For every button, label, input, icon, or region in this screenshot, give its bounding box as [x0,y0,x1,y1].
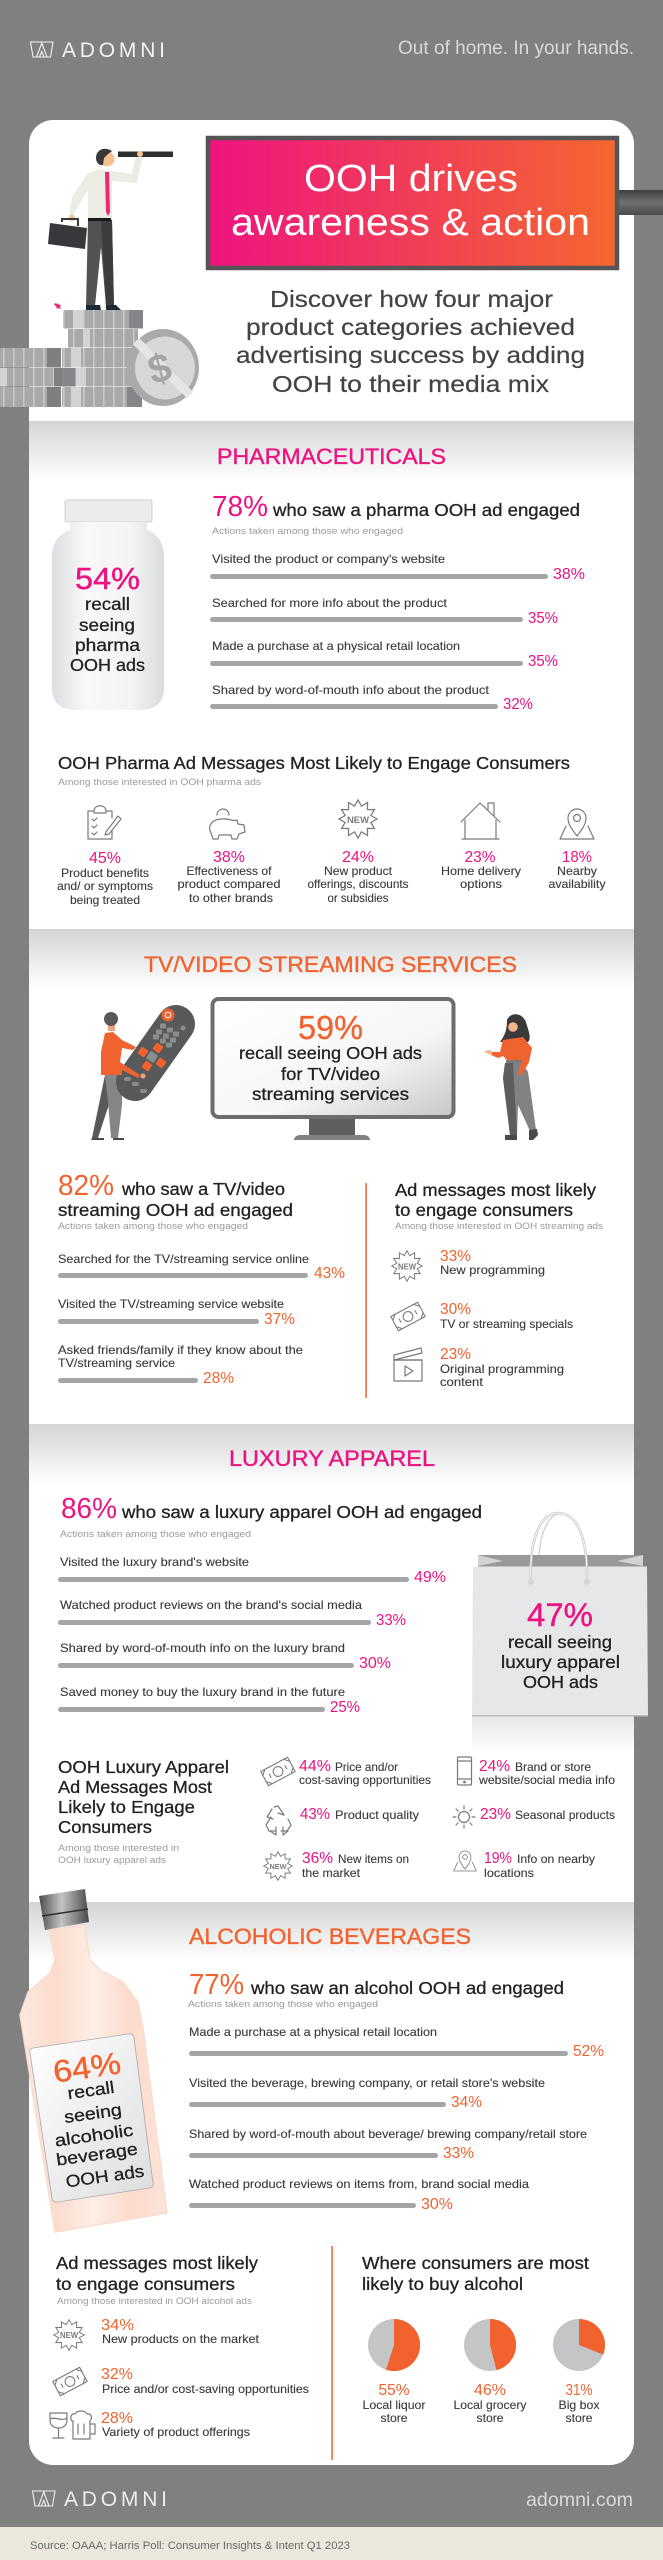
panel: intro [0,138,663,407]
messages heading: Likely to Engage [58,1797,195,1817]
intro text: advertising success by adding [236,342,585,368]
item: new items [264,1850,409,1880]
heading: LUXURY APPAREL [229,1446,435,1471]
pill bottle with 54% recall: pharma [75,635,140,655]
bar chart: luxury actions: 33% [376,1612,406,1629]
pie chart: local grocery store [454,2319,526,2425]
pie chart: local liquor store: store [380,2411,408,2425]
messages heading [395,1180,604,1231]
footer [0,2488,663,2560]
bar chart: streaming actions: 43% [314,1265,345,1282]
item: quality [266,1806,419,1835]
item: price: Price and/or cost-saving opportunities [102,2382,309,2396]
panel: luxury apparel [29,1424,648,1880]
pie chart: big box store: 31% [566,2382,593,2399]
section band [29,1424,634,1484]
messages heading: Ad messages most likely [56,2253,258,2273]
icon: new burst [264,1852,292,1880]
shopping bag with 47% recall: recall seeing [508,1632,612,1652]
icon: new burst: NEW [60,2331,78,2340]
heading: PHARMACEUTICALS [217,444,446,469]
intro text: product categories achieved [246,314,575,340]
bar chart: luxury actions: 25% [330,1699,360,1716]
item: home delivery [441,803,521,891]
item: new items: the market [302,1866,361,1880]
where to buy heading: likely to buy alcohol [362,2274,523,2294]
item: specials: TV or streaming specials [440,1317,573,1331]
bottle with 64% recall: beverage [55,2139,139,2170]
messages heading: to engage consumers [395,1200,573,1220]
messages heading [58,753,570,787]
billboard pole [618,190,663,215]
messages heading: OOH luxury apparel ads [58,1855,167,1865]
bar chart: alcohol actions: Watched product reviews on items from, brand social media [189,2177,529,2191]
item: quality: 43% [300,1806,330,1823]
tv monitor with 59% recall: for TV/video [281,1064,380,1084]
item: variety [50,2410,250,2439]
tagline: Out of home. In your hands. [398,38,634,59]
shopping bag with 47% recall [472,1513,648,1752]
shopping bag with 47% recall: OOH ads [523,1672,598,1692]
engagement heading: 82% [58,1170,114,1202]
icon: house [461,803,500,839]
shopping bag with 47% recall: 47% [527,1597,593,1633]
engagement heading: who saw a luxury apparel OOH ad engaged [121,1502,482,1522]
icon: glass and beer mug [50,2411,95,2439]
bar chart: luxury actions: 49% [414,1569,446,1586]
icon: new burst: NEW [270,1862,287,1871]
icon: money [53,2367,87,2396]
pill bottle with 54% recall: 54% [75,561,140,596]
item: new product offerings: offerings, discounts [308,877,408,891]
item: effectiveness: to other brands [189,891,273,905]
item: price: 44% [299,1758,331,1775]
illustration: woman [484,1014,538,1140]
intro text: Discover how four major [270,286,553,312]
engagement heading: who saw a pharma OOH ad engaged [272,500,580,520]
bottle with 64% recall: OOH ads [64,2162,145,2191]
source band [0,2527,663,2560]
bar chart: pharma actions: 35% [528,653,558,670]
item: original programming: Original programming [440,1362,564,1376]
pill bottle with 54% recall: seeing [79,615,135,635]
tv monitor with 59% recall: recall seeing OOH ads [239,1043,422,1063]
item: new product offerings: 24% [342,849,374,866]
item: price: 32% [101,2366,133,2383]
item: original programming [394,1346,564,1389]
illustration: stacked coins [0,310,143,407]
bar chart: luxury actions [58,1555,446,1716]
source band: Source: OAAA; Harris Poll: Consumer Insights & Intent Q1 2023 [30,2540,350,2552]
item: product benefits: and/ or symptoms [57,879,153,893]
item: original programming: 23% [440,1346,471,1363]
bar chart: luxury actions: 30% [359,1655,391,1672]
pie chart: local liquor store: 55% [378,2382,410,2399]
item: effectiveness: 38% [213,849,245,866]
icon: clipboard [88,806,121,839]
item: new product offerings: or subsidies [328,891,388,905]
item: new items: New items on [338,1852,409,1866]
divider [365,1183,367,1398]
bar chart: streaming actions: 28% [203,1370,234,1387]
engagement heading: Actions taken among those who engaged [58,1221,248,1231]
engagement heading: Actions taken among those who engaged [212,526,403,536]
icon: recycle [266,1806,291,1835]
illustration: large dollar coin: $ [143,345,176,393]
billboard title: awareness & action [231,202,590,244]
item: effectiveness: Effectiveness of [186,864,272,878]
item: product benefits: Product benefits [61,866,149,880]
bar chart: pharma actions: Shared by word-of-mouth info about the product [212,683,490,697]
header [30,38,634,62]
pie chart: local grocery store: Local grocery [454,2398,526,2412]
logo: Adomni: ADOMNI [64,2488,167,2511]
item: quality: Product quality [335,1808,419,1822]
where to buy heading: Where consumers are most [362,2253,589,2273]
bar chart: streaming actions: 37% [264,1311,295,1328]
icon: new burst: NEW [347,815,370,825]
where to buy heading [362,2253,589,2294]
item: new programming: New programming [440,1263,545,1277]
item: original programming: content [440,1375,484,1389]
engagement heading: 86% [61,1493,117,1525]
pill bottle with 54% recall [52,500,164,710]
icon: map pin [454,1851,476,1871]
illustration: businessman with telescope [48,149,173,310]
bar chart: pharma actions [210,552,585,713]
icon: new burst [54,2320,84,2350]
panel: pharmaceuticals [29,421,634,907]
item: nearby availability: Nearby [557,864,597,878]
bar chart: luxury actions: Watched product reviews on the brand's social media [60,1598,362,1612]
icon: money [391,1302,425,1331]
bottle with 64% recall: alcoholic [53,2121,135,2150]
item: price: cost-saving opportunities [299,1773,431,1787]
pie chart: local grocery store: 46% [474,2382,506,2399]
bar chart: pharma actions: 38% [553,566,585,583]
tv monitor with 59% recall: streaming services [252,1084,409,1104]
item: price [261,1757,431,1787]
bar chart: streaming actions [58,1252,345,1387]
item: product benefits: being treated [70,893,140,907]
bar chart: pharma actions: Visited the product or company's website [212,552,445,566]
tv monitor with 59% recall: 59% [298,1009,363,1046]
engagement heading [188,1969,564,2009]
bar chart: alcohol actions: Visited the beverage, brewing company, or retail store's website [189,2076,545,2090]
item: new items: 36% [302,1850,333,1867]
item: new products: New products on the market [102,2332,260,2346]
icon: new burst [392,1251,422,1281]
item: brand website [458,1757,615,1787]
bar chart: alcohol actions: 34% [451,2094,482,2111]
pill bottle with 54% recall: OOH ads [70,655,145,675]
item: effectiveness: product compared [178,877,280,891]
bar chart: alcohol actions: Made a purchase at a physical retail location [189,2025,437,2039]
item: nearby availability: availability [548,877,606,891]
messages heading: Ad messages most likely [395,1180,596,1200]
icon: map pin [560,809,594,839]
panel: alcoholic beverages [20,1889,634,2460]
item: seasonal: Seasonal products [515,1808,615,1822]
item: home delivery: Home delivery [441,864,521,878]
section band [29,1902,634,1962]
bar chart: streaming actions: Visited the TV/streaming service website [58,1297,284,1311]
tv monitor with 59% recall [212,999,454,1140]
engagement heading [60,1493,482,1539]
item: specials [391,1301,573,1331]
panel: tv/video streaming services [29,929,634,1398]
engagement heading [58,1170,293,1231]
pie chart: local liquor store: Local liquor [362,2398,426,2412]
engagement heading: Actions taken among those who engaged [188,1999,378,2009]
messages heading: Among those interested in OOH pharma ads [58,777,262,787]
messages heading: to engage consumers [56,2274,235,2294]
messages heading: OOH Luxury Apparel [58,1757,229,1777]
item: nearby availability: 18% [562,849,592,866]
intro text [236,286,585,397]
illustration: man with remote [91,1008,186,1140]
item: seasonal: 23% [480,1806,511,1823]
heading: TV/VIDEO STREAMING SERVICES [144,952,517,977]
logo: Adomni: ADOMNI [62,39,165,62]
engagement heading: 77% [189,1969,244,2001]
pie chart: big box store [553,2319,605,2425]
messages heading: Among those interested in OOH alcohol ads [57,2296,253,2306]
pie chart: local grocery store: store [476,2411,504,2425]
item: nearby locations: Info on nearby [517,1852,595,1866]
pie chart: local liquor store [362,2319,426,2425]
bottle with 64% recall: seeing [63,2100,123,2127]
shopping bag with 47% recall: luxury apparel [501,1652,620,1672]
icon: new burst: NEW [398,1262,416,1272]
messages heading: Among those interested in [58,1843,179,1853]
item: home delivery: options [460,877,502,891]
section band [29,421,634,481]
item: brand website: 24% [479,1758,510,1775]
bar chart: pharma actions: Made a purchase at a physical retail location [212,639,460,653]
billboard title: OOH drives [304,158,518,200]
item: specials: 30% [440,1301,471,1318]
item: effectiveness [178,809,280,905]
engagement heading: 78% [212,491,268,523]
illustration: large dollar coin [127,329,199,406]
messages heading: Among those interested in OOH streaming ads [395,1221,604,1231]
item: variety: 28% [101,2410,133,2427]
heading: ALCOHOLIC BEVERAGES [189,1924,471,1949]
icon: piggy bank [210,809,245,839]
icon: clapperboard [394,1348,422,1381]
item: nearby availability [548,809,606,891]
item: product benefits: 45% [89,850,121,867]
item: new product offerings: New product [324,864,393,878]
bar chart: streaming actions: Searched for the TV/streaming service online [58,1252,309,1266]
item: nearby locations: 19% [484,1850,512,1867]
section band [29,929,634,989]
website: adomni.com [526,2490,633,2511]
bottle with 64% recall: recall [66,2078,116,2103]
intro text: OOH to their media mix [272,371,550,397]
item: new programming [392,1248,545,1281]
bar chart: alcohol actions: Shared by word-of-mouth about beverage/ brewing company/retail store [189,2127,587,2141]
pie chart: big box store: Big box [558,2398,600,2412]
pie chart: big box store: store [566,2411,593,2425]
item: nearby locations [454,1850,595,1880]
bar chart: streaming actions: Asked friends/family if they know about the [58,1343,303,1357]
item: new products: 34% [101,2317,134,2334]
divider [331,2246,333,2460]
item: brand website: website/social media info [478,1773,615,1787]
messages heading: Ad Messages Most [58,1777,212,1797]
item: product benefits [57,806,153,907]
item: price: Price and/or [335,1760,398,1774]
item: new products [54,2317,260,2350]
icon: phone [458,1757,472,1785]
item: new programming: 33% [440,1248,471,1265]
bar chart: alcohol actions: 52% [573,2043,604,2060]
bottle with 64% recall: 64% [51,2045,123,2090]
engagement heading: who saw an alcohol OOH ad engaged [250,1978,564,1998]
engagement heading: Actions taken among those who engaged [60,1529,251,1539]
messages heading: OOH Pharma Ad Messages Most Likely to Engage Consumers [58,753,570,773]
engagement heading: who saw a TV/video [121,1179,285,1199]
pill bottle with 54% recall: recall [85,594,130,614]
bar chart: alcohol actions: 30% [421,2196,453,2213]
item: seasonal [453,1806,615,1828]
bar chart: pharma actions: 35% [528,610,558,627]
item: nearby locations: locations [484,1866,534,1880]
bottle with 64% recall [20,1889,167,2232]
messages heading [58,1757,229,1865]
item: brand website: Brand or store [515,1760,591,1774]
bar chart: luxury actions: Saved money to buy the luxury brand in the future [60,1685,345,1699]
bar chart: luxury actions: Shared by word-of-mouth info on the luxury brand [60,1641,345,1655]
item: variety: Variety of product offerings [102,2425,250,2439]
bar chart: streaming actions: TV/streaming service [58,1356,175,1370]
item: home delivery: 23% [464,849,496,866]
bar chart: alcohol actions: 33% [443,2145,474,2162]
engagement heading [212,491,580,536]
bar chart: luxury actions: Visited the luxury brand's website [60,1555,249,1569]
bar chart: pharma actions: Searched for more info about the product [212,596,448,610]
engagement heading: streaming OOH ad engaged [58,1200,293,1220]
messages heading: Consumers [58,1817,152,1837]
item: price [53,2366,309,2396]
item: new product offerings [308,800,408,905]
icon: sun [453,1806,475,1828]
bar chart: pharma actions: 32% [503,696,533,713]
bar chart: alcohol actions [189,2025,604,2213]
messages heading [56,2253,258,2306]
billboard title [208,138,617,268]
icon: money [261,1757,295,1786]
